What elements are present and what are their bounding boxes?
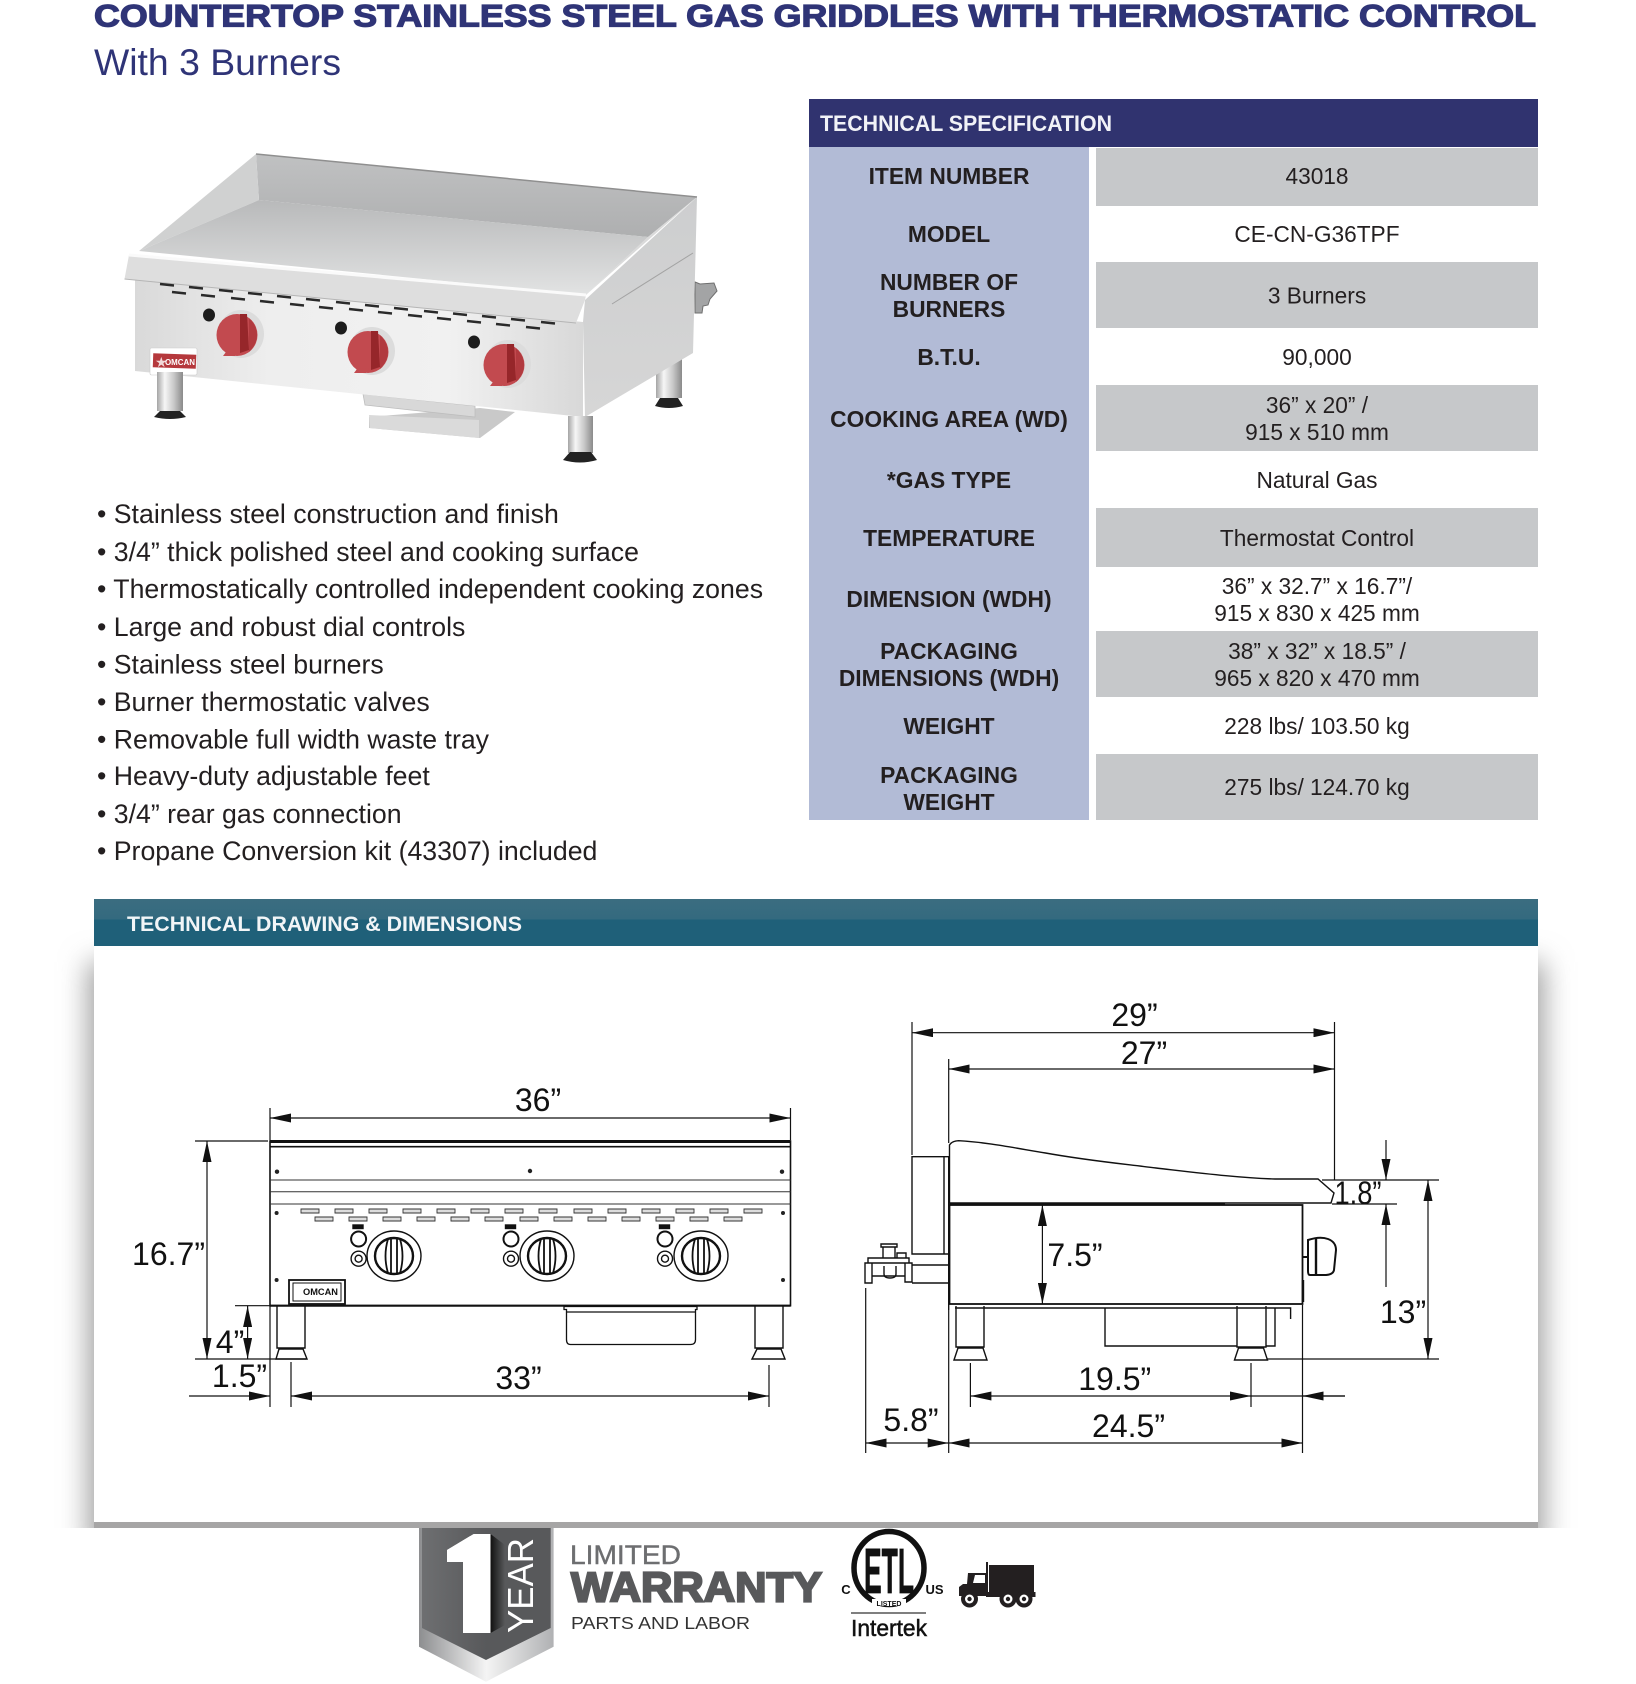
row labels: NUMBER OF [880,269,1018,295]
row labels [830,163,1068,815]
section header [94,899,1538,946]
dimension: 4 inch: 4” [216,1324,244,1360]
panel: technical specification table [809,99,1538,820]
table header [809,99,1538,147]
subtitle: With 3 Burners [94,42,341,83]
dimension: 19.5 inch [970,1361,1345,1407]
griddle gas connector [695,282,717,313]
front view legs [276,1306,785,1359]
warranty text: PARTS AND LABOR [571,1613,750,1633]
dimension: 4 inch [216,1306,270,1360]
griddle logo badge: ★ [155,354,168,370]
griddle back wall [256,154,697,237]
table header: TECHNICAL SPECIFICATION [820,111,1112,136]
ETL Intertek certification mark [841,1532,944,1641]
row labels: WEIGHT [903,713,995,739]
shield dark [422,1528,551,1660]
griddle back right leg [655,358,683,408]
front view knob 3 [658,1225,728,1281]
row values: 965 x 820 x 470 mm [1214,665,1420,691]
dimension: 13 inch: 13” [1380,1294,1426,1330]
side view gas pipe [912,1265,949,1283]
dimension: 36 inch [270,1082,790,1140]
griddle front left leg [154,372,186,419]
dimension: 16.7 inch [132,1141,306,1359]
value column stripes [1096,148,1538,820]
griddle vent slots [160,284,555,328]
griddle logo badge [150,348,197,375]
dimension: 24.5 inch [949,1305,1302,1453]
row values: 43018 [1285,163,1349,189]
row values: 915 x 830 x 425 mm [1214,600,1420,626]
features list: • Thermostatically controlled independent cooking zones [97,574,763,604]
griddle side wall inner [139,154,259,251]
griddle pilot holes [203,308,480,348]
warranty badge: 1 year [419,1528,554,1682]
dimension: 24.5 inch: 24.5” [1092,1408,1165,1444]
ETL Intertek certification mark: Intertek [851,1615,927,1641]
features list: • Stainless steel burners [97,650,384,680]
ETL Intertek certification mark: ETL [864,1535,914,1607]
ETL Intertek certification mark: C [841,1582,851,1597]
front view knob 2 [504,1225,574,1281]
row labels: DIMENSION (WDH) [846,586,1052,612]
features list: • Burner thermostatic valves [97,687,430,717]
dimension: 1.5 inch: 1.5” [212,1358,267,1394]
dimension: 29 inch: 29” [1111,997,1158,1033]
row values: 36” x 20” / [1266,392,1369,418]
year label: YEAR [500,1538,541,1633]
ETL Intertek certification mark: LISTED [877,1601,901,1608]
row labels: DIMENSIONS (WDH) [839,665,1059,691]
features list: • Propane Conversion kit (43307) included [97,836,597,866]
panel body [94,945,1538,1522]
dimension: 16.7 inch: 16.7” [132,1236,205,1272]
row values: Natural Gas [1256,467,1378,493]
side view knob [1303,1238,1336,1302]
front view vent slots [301,1209,762,1221]
dimension: 1.8 inch [1322,1140,1439,1287]
dimension: 7.5 inch: 7.5” [1047,1237,1103,1273]
row labels: COOKING AREA (WD) [830,406,1068,432]
numeral shadow [490,1534,505,1633]
front view drawing [132,1082,790,1407]
features list: • 3/4” rear gas connection [97,799,402,829]
griddle front body [135,280,583,417]
features list: • Removable full width waste tray [97,724,490,754]
griddle knob 1 [216,310,264,358]
row values: 915 x 510 mm [1245,419,1389,445]
icon: delivery truck [959,1562,1036,1608]
row values: Thermostat Control [1220,525,1414,551]
warranty text: WARRANTY [571,1564,822,1610]
dimension: 29 inch [912,997,1334,1180]
product photo: griddle [124,154,717,462]
side view rear box [912,1156,949,1310]
features list: • Large and robust dial controls [97,612,465,642]
dimension: 27 inch: 27” [1121,1035,1167,1071]
row values: CE-CN-G36TPF [1234,221,1400,247]
row values: 3 Burners [1268,282,1366,308]
side view drawing [865,997,1439,1453]
front view screws [275,1169,785,1282]
side view legs and plate [954,1306,1291,1360]
front view knob 1 [351,1225,421,1281]
features list: • 3/4” thick polished steel and cooking surface [97,537,639,567]
dimension: 1.8 inch: 1.8” [1334,1175,1382,1211]
dimension: 5.8 inch: 5.8” [883,1402,939,1438]
features list [97,499,763,866]
warranty text [570,1540,822,1633]
row labels: BURNERS [893,296,1005,322]
side view body [950,1204,1302,1304]
shield silver [419,1528,554,1682]
row labels: ITEM NUMBER [869,163,1029,189]
dimension: 1.5 inch [189,1306,291,1407]
row labels: TEMPERATURE [863,525,1035,551]
griddle front lip [124,255,586,323]
panel: technical drawing and dimensions [88,899,1544,1552]
griddle front right leg [563,416,597,462]
row labels: PACKAGING [880,638,1018,664]
features list: • Heavy-duty adjustable feet [97,761,430,791]
row labels: B.T.U. [917,344,981,370]
front view logo plate [289,1280,345,1304]
griddle knob 3 [484,340,531,388]
row values: 228 lbs/ 103.50 kg [1224,713,1410,739]
dimension: 7.5 inch [1042,1205,1103,1304]
row values [1214,163,1420,800]
label column [809,147,1089,820]
dimension: 33 inch: 33” [495,1360,542,1396]
front view body [270,1141,790,1306]
panel shadow [88,962,1544,1552]
features list: • Stainless steel construction and finish [97,499,559,529]
griddle cooking surface [139,200,648,295]
row labels: MODEL [908,221,990,247]
griddle waste tray [363,394,515,438]
griddle knob 2 [348,327,395,375]
row values: 90,000 [1282,344,1352,370]
row values: 36” x 32.7” x 16.7”/ [1222,573,1413,599]
griddle logo badge: OMCAN [165,358,195,367]
warranty text: LIMITED [570,1540,681,1570]
numeral 1: 1 [432,1505,510,1663]
row labels: *GAS TYPE [887,467,1011,493]
panel bottom band [94,1522,1538,1528]
row labels: PACKAGING [880,762,1018,788]
side view waste tray [1105,1308,1237,1346]
front view logo plate: OMCAN [303,1287,338,1297]
row labels: WEIGHT [903,789,995,815]
ETL Intertek certification mark: US [925,1582,944,1597]
side view gas regulator [865,1244,912,1283]
dimension: 19.5 inch: 19.5” [1078,1361,1151,1397]
section header: TECHNICAL DRAWING & DIMENSIONS [127,913,522,936]
dimension: 36 inch: 36” [515,1082,561,1118]
row values: 38” x 32” x 18.5” / [1228,638,1407,664]
row values: 275 lbs/ 124.70 kg [1224,774,1410,800]
side view hood [950,1141,1334,1203]
griddle side panel [583,197,697,417]
front view waste tray [564,1306,697,1344]
